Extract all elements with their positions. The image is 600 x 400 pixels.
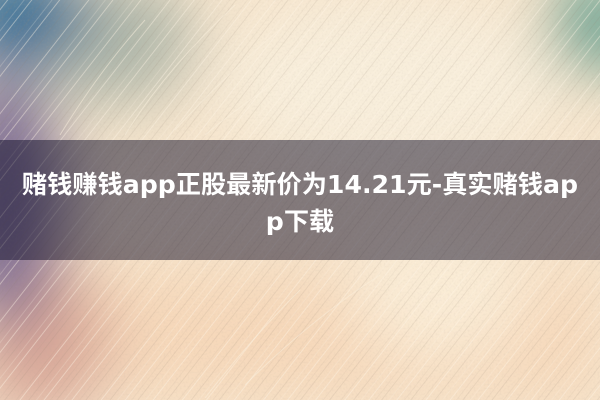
title: p下载 [266, 207, 334, 236]
title: 赌钱赚钱app正股最新价为14.21元-真实赌钱ap [22, 170, 578, 199]
translucent title band [0, 140, 600, 260]
title [22, 170, 578, 236]
